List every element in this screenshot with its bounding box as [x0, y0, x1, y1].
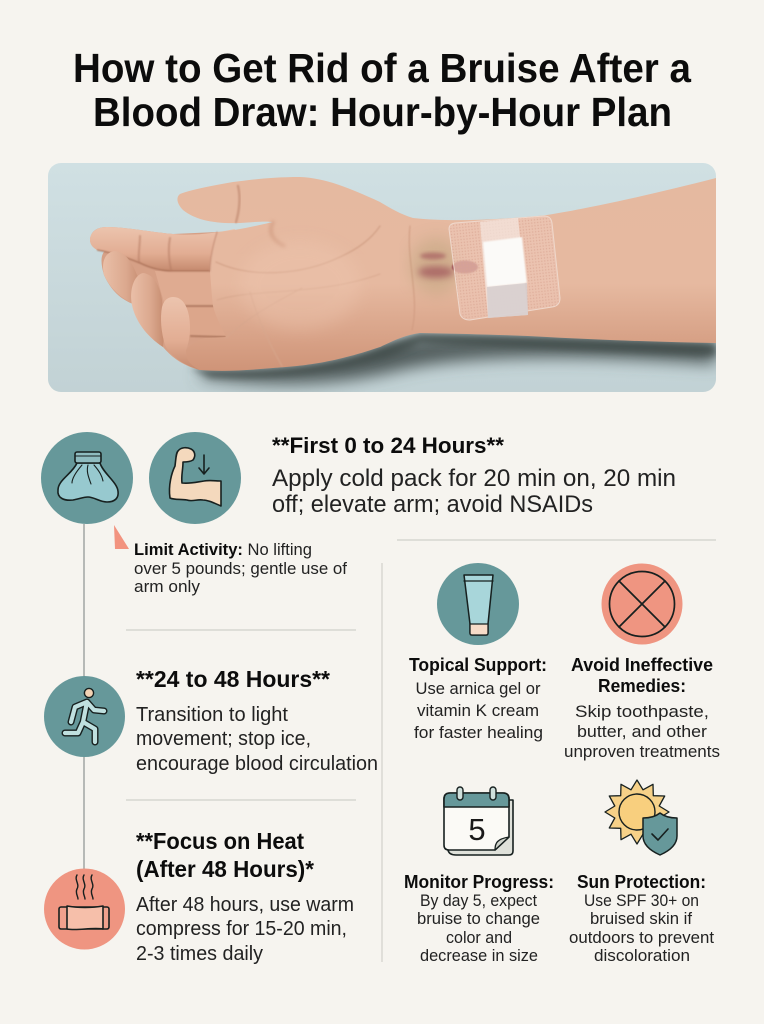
panel: monitor progress: decrease in size	[420, 946, 538, 965]
panel: avoid ineffective remedies: Skip toothpaste,	[575, 702, 709, 721]
panel: topical support: for faster healing	[414, 723, 543, 742]
icon: ointment tube	[437, 563, 519, 645]
icon: coral pointer	[114, 525, 129, 549]
text: 24 to 48 hours body	[136, 704, 378, 775]
panel: sun protection: outdoors to prevent	[569, 928, 714, 947]
icon: warm compress	[44, 868, 125, 950]
timeline connector	[83, 524, 85, 869]
text: first 0 to 24 hours body	[272, 465, 676, 518]
icon: crossed-out circle	[602, 564, 682, 644]
panel: monitor progress: By day 5, expect	[420, 891, 537, 910]
panel: sun protection: discoloration	[594, 946, 690, 965]
panel: monitor progress	[404, 872, 554, 965]
pinky finger	[161, 297, 200, 370]
icon: flexed arm	[149, 432, 241, 524]
title: How to Get Rid of a Bruise After a	[73, 45, 692, 91]
panel: topical support: Use arnica gel or	[416, 679, 541, 698]
panel: sun protection	[569, 872, 714, 965]
panel: topical support: Topical Support:	[409, 655, 547, 675]
finger segments behind palm	[155, 271, 215, 306]
heading: first 0 to 24 hours: **First 0 to 24 Hours**	[272, 433, 504, 458]
photo: bandaged wrist with bruise	[48, 163, 716, 392]
text: 24 to 48 hours body: movement; stop ice,	[136, 728, 311, 750]
ring finger	[131, 273, 164, 347]
callout: limit activity: arm only	[134, 578, 201, 596]
panel: sun protection: Use SPF 30+ on	[584, 891, 699, 910]
icon: calendar showing day 5	[444, 787, 513, 855]
heading: 24 to 48 hours: **24 to 48 Hours**	[136, 666, 330, 692]
panel: sun protection: Sun Protection:	[577, 872, 706, 892]
panel: sun protection: bruised skin if	[590, 909, 692, 928]
callout: limit activity: over 5 pounds; gentle use of	[134, 560, 347, 578]
panel: avoid ineffective remedies: Remedies:	[598, 676, 686, 696]
text: 24 to 48 hours body: encourage blood circulation	[136, 753, 378, 775]
bandage	[449, 216, 560, 320]
panel: monitor progress: bruise to change	[417, 909, 540, 928]
text: first 0 to 24 hours body: off; elevate arm; avoid NSAIDs	[272, 491, 593, 518]
callout: limit activity: Limit Activity: No lifting	[134, 541, 312, 559]
panel: topical support	[409, 655, 547, 742]
text: focus on heat body: After 48 hours, use warm	[136, 894, 354, 916]
panel: avoid ineffective remedies: butter, and other	[577, 722, 707, 741]
middle finger	[103, 252, 138, 300]
panel: monitor progress: Monitor Progress:	[404, 872, 554, 892]
bruise	[410, 238, 462, 294]
title	[73, 45, 692, 135]
hand silhouette base	[90, 227, 223, 370]
arm and palm	[177, 177, 716, 371]
panel: avoid ineffective remedies	[564, 655, 720, 761]
panel: avoid ineffective remedies: unproven treatments	[564, 742, 720, 761]
text: focus on heat body	[136, 894, 354, 965]
panel: avoid ineffective remedies: Avoid Ineffective	[571, 655, 713, 675]
icon: calendar showing day 5: 5	[468, 812, 486, 847]
title: Blood Draw: Hour-by-Hour Plan	[93, 89, 672, 135]
text: 24 to 48 hours body: Transition to light	[136, 704, 288, 726]
text: focus on heat body: 2-3 times daily	[136, 943, 263, 965]
panel: monitor progress: color and	[446, 928, 512, 947]
icon: cold pack	[41, 432, 133, 524]
palm shading and creases	[138, 184, 415, 316]
text: focus on heat body: compress for 15-20 min,	[136, 918, 347, 940]
text: first 0 to 24 hours body: Apply cold pack for 20 min on, 20 min	[272, 465, 676, 492]
heading: focus on heat: (After 48 Hours)*	[136, 856, 314, 882]
panel: topical support: vitamin K cream	[417, 701, 539, 720]
icon: running person	[44, 676, 125, 757]
heading: focus on heat: **Focus on Heat	[136, 828, 304, 854]
callout: limit activity	[134, 541, 347, 596]
heading: focus on heat	[136, 828, 314, 882]
index finger	[90, 227, 235, 271]
icon: sun and shield	[605, 780, 677, 855]
